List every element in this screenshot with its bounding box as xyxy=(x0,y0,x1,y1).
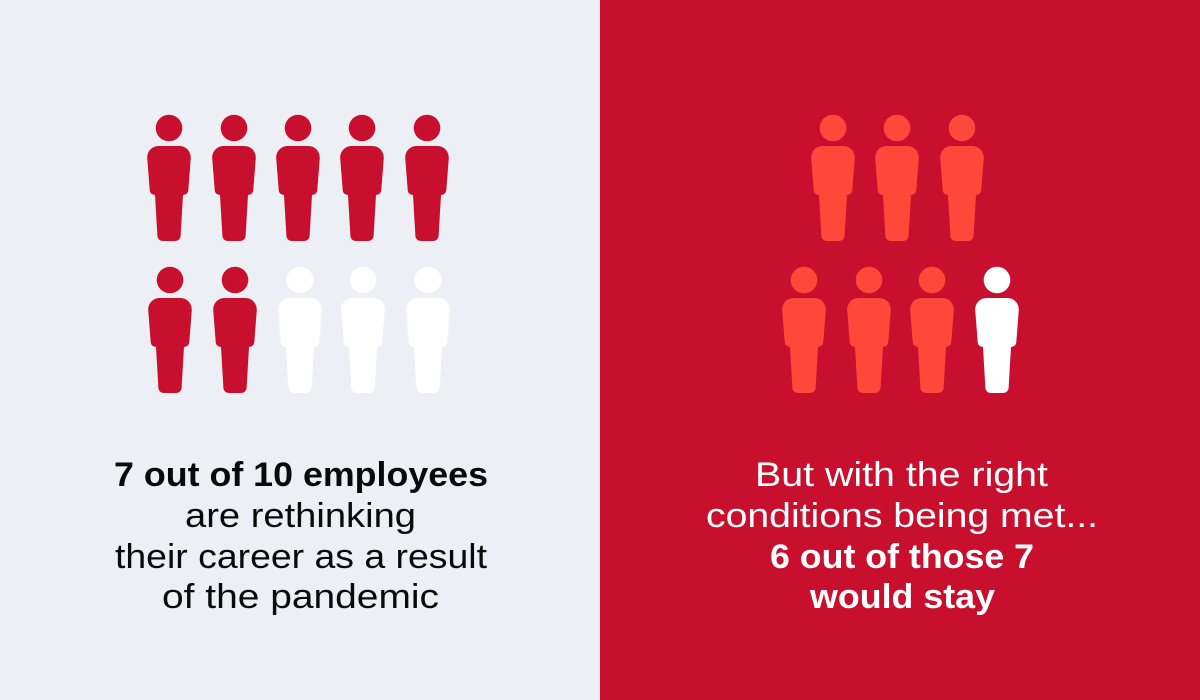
icon: person 6 coral xyxy=(910,267,954,393)
icon: person 10 white xyxy=(406,267,450,393)
icon: person 4 coral xyxy=(782,267,826,393)
icon: person 9 white xyxy=(341,267,385,393)
icon: person 2 coral xyxy=(875,115,919,241)
text block: left caption: their career as a result xyxy=(115,538,488,576)
icon: person 8 white xyxy=(278,267,322,393)
icon: person 1 xyxy=(147,115,191,241)
text block: right caption xyxy=(706,456,1098,616)
text block: right caption: conditions being met... xyxy=(706,497,1098,535)
icon: person 5 coral xyxy=(847,267,891,393)
text block: left caption: are rethinking xyxy=(185,497,416,535)
text block: right caption: But with the right xyxy=(755,456,1049,494)
pictogram: 7 of 10 employees xyxy=(147,115,450,393)
text block: left caption xyxy=(114,456,488,616)
text block: right caption: 6 out of those 7 xyxy=(770,538,1034,576)
icon: person 2 xyxy=(212,115,256,241)
pictogram: 6 of 7 would stay xyxy=(782,115,1019,393)
text block: left caption: 7 out of 10 employees xyxy=(114,456,488,494)
icon: person 1 coral xyxy=(811,115,855,241)
panel: left background xyxy=(0,0,600,700)
icon: person 7 white xyxy=(975,267,1019,393)
icon: person 7 xyxy=(213,267,257,393)
icon: person 3 xyxy=(276,115,320,241)
panel: right background xyxy=(600,0,1200,700)
icon: person 4 xyxy=(340,115,384,241)
icon: person 3 coral xyxy=(940,115,984,241)
text block: right caption: would stay xyxy=(809,578,995,616)
icon: person 6 xyxy=(148,267,192,393)
icon: person 5 xyxy=(405,115,449,241)
text block: left caption: of the pandemic xyxy=(162,578,439,616)
